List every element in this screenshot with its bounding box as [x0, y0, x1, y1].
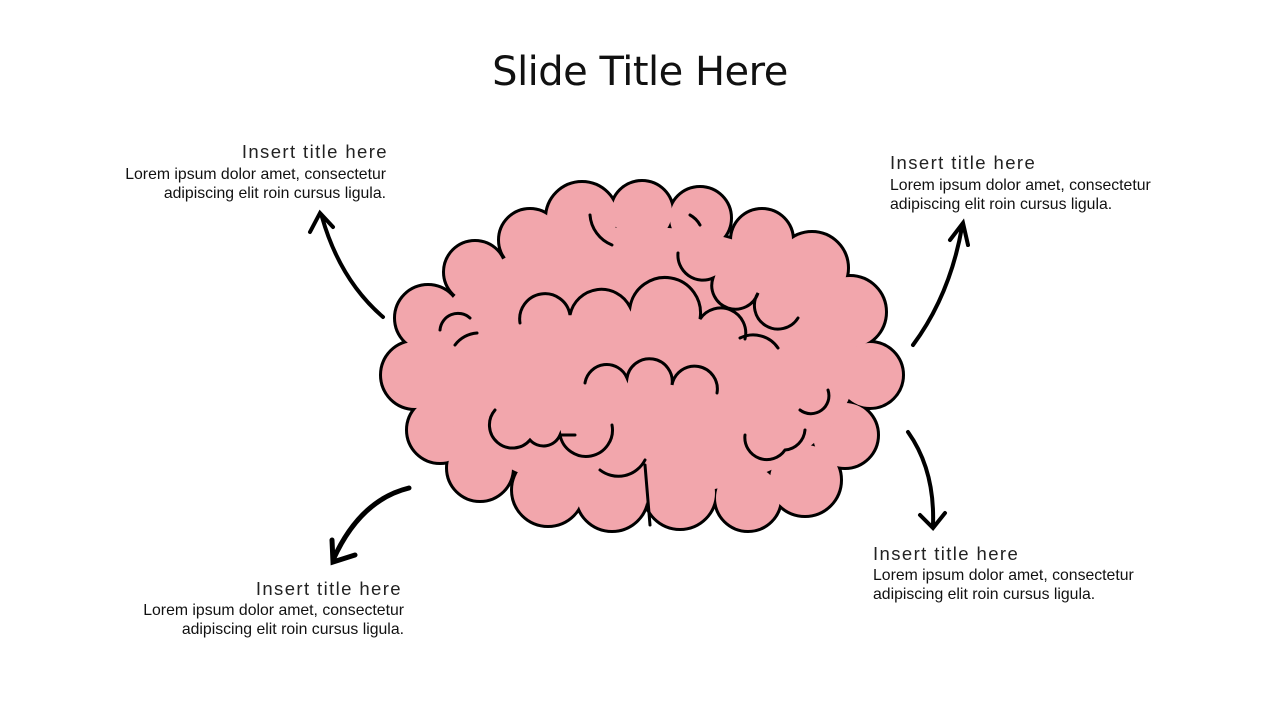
- body: [873, 567, 1134, 603]
- heading: Insert title here: [256, 578, 402, 599]
- body: Lorem ipsum dolor amet, consectetur: [890, 177, 1151, 194]
- text block: top-right: [890, 152, 1151, 213]
- arrow: bottom-right: [906, 430, 948, 531]
- body: Lorem ipsum dolor amet, consectetur: [143, 602, 404, 619]
- title: Slide Title Here: [492, 49, 788, 95]
- body: [125, 166, 386, 202]
- body: [890, 177, 1151, 213]
- arrow: top-right: [910, 218, 970, 348]
- body: adipiscing elit roin cursus ligula.: [890, 196, 1112, 213]
- body: Lorem ipsum dolor amet, consectetur: [125, 166, 386, 183]
- body: Lorem ipsum dolor amet, consectetur: [873, 567, 1134, 584]
- arrow: top-left: [308, 210, 386, 320]
- body: adipiscing elit roin cursus ligula.: [182, 621, 404, 638]
- text block: top-left: [125, 141, 388, 202]
- heading: Insert title here: [890, 152, 1036, 173]
- text block: bottom-right: [873, 543, 1134, 603]
- arrow: bottom-left: [330, 486, 412, 566]
- heading: Insert title here: [873, 543, 1019, 564]
- body: adipiscing elit roin cursus ligula.: [164, 185, 386, 202]
- text block: bottom-left: [143, 578, 404, 638]
- heading: Insert title here: [242, 141, 388, 162]
- body: adipiscing elit roin cursus ligula.: [873, 586, 1095, 603]
- body: [143, 602, 404, 638]
